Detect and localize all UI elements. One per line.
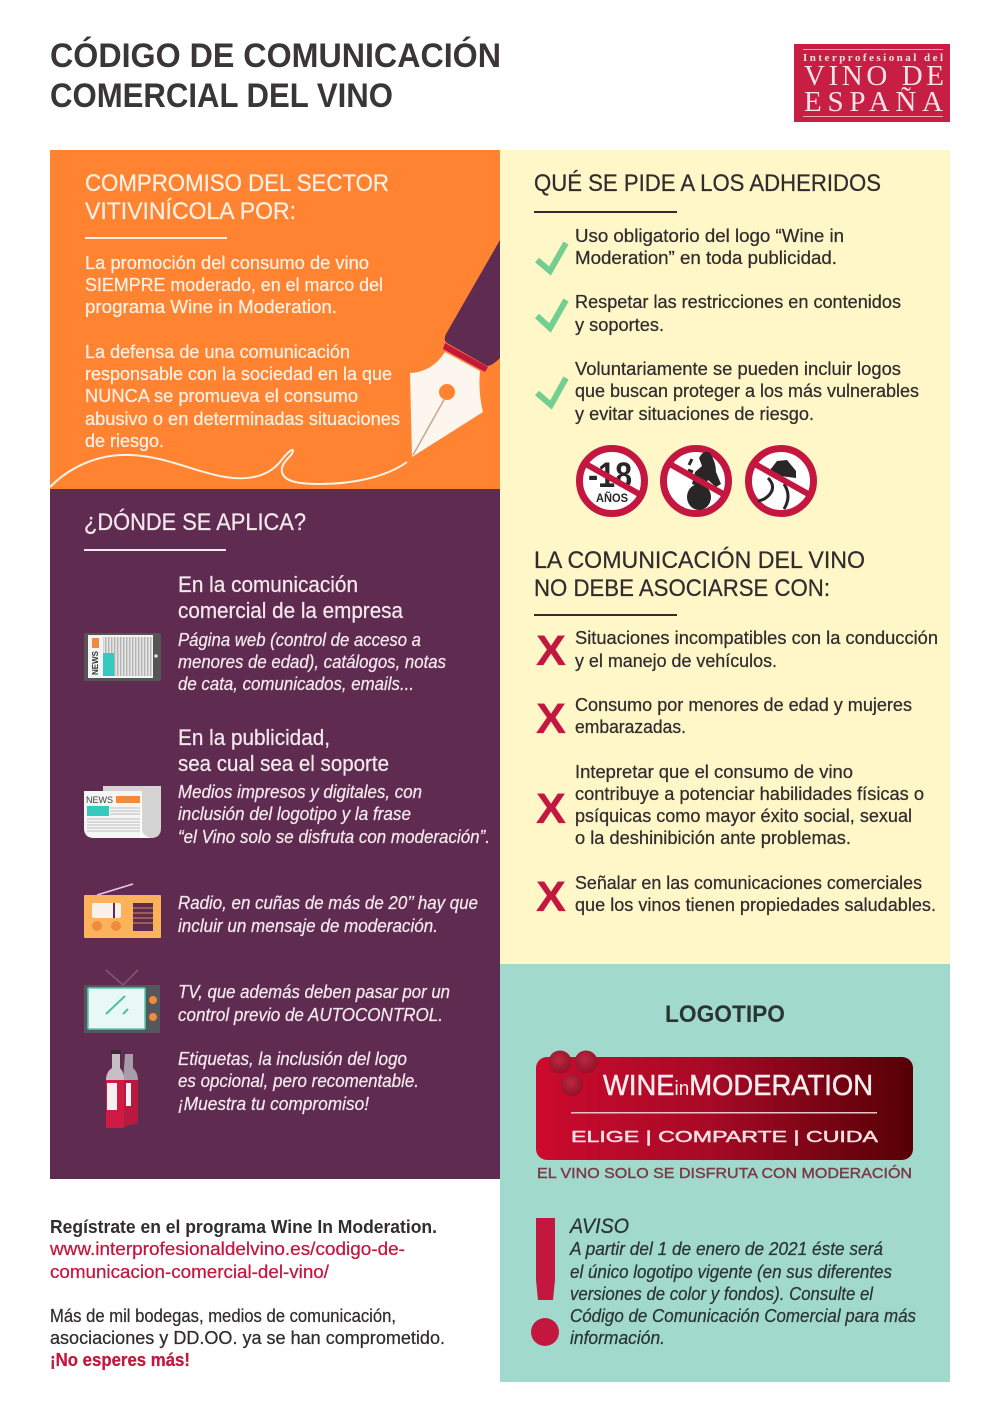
item: habilidades: psíquicas como mayor éxito social, sexual	[575, 806, 912, 826]
text block: regístrate: Regístrate en el programa Wine In Moderation.	[50, 1217, 437, 1237]
icon: check 2	[537, 300, 566, 328]
text block: promoción: La promoción del consumo de vino	[85, 253, 369, 273]
text block: medios	[178, 782, 490, 847]
text block: medios: inclusión del logotipo y la frase	[178, 804, 411, 824]
title: CÓDIGO DE COMUNICACIÓN	[50, 37, 501, 75]
text block: promoción: programa Wine in Moderation.	[85, 297, 337, 317]
item: saludables: que los vinos tienen propiedades saludables.	[575, 895, 936, 915]
item: logo obligatorio	[575, 226, 844, 268]
item: restricciones: Respetar las restricciones en contenidos	[575, 292, 901, 312]
icon: exclamation mark	[531, 1218, 559, 1346]
logo: wine in moderation	[536, 1050, 913, 1160]
text block: tv	[178, 982, 450, 1025]
item: conducción	[575, 628, 938, 671]
text block: tv: TV, que además deben pasar por un	[178, 982, 450, 1002]
text block: medios: Medios impresos y digitales, con	[178, 782, 422, 802]
title: COMERCIAL DEL VINO	[50, 77, 393, 115]
text block: aviso: Código de Comunicación Comercial para más	[570, 1306, 916, 1326]
icon: prohibido menores de 18: -18	[588, 456, 632, 495]
subheading: comunicación comercial: comercial de la empresa	[178, 598, 404, 623]
text block: medios: “el Vino solo se disfruta con moderación”.	[178, 827, 490, 847]
item: menores: Consumo por menores de edad y mujeres	[575, 695, 912, 715]
icon: television	[84, 970, 160, 1033]
icon: newspaper: NEWS	[86, 795, 113, 806]
heading: compromiso: VITIVINÍCOLA POR:	[85, 198, 296, 225]
icon: tablet news: NEWS	[91, 650, 100, 675]
heading: compromiso	[85, 170, 389, 225]
item: menores: embarazadas.	[575, 717, 686, 737]
icon: prohibido menores de 18	[580, 448, 644, 514]
item: saludables: Señalar en las comunicaciones comerciales	[575, 873, 922, 893]
text block: tv: control previo de AUTOCONTROL.	[178, 1005, 443, 1025]
text block: etiquetas: ¡Muestra tu compromiso!	[178, 1094, 369, 1114]
item: restricciones	[575, 292, 901, 335]
icon: newspaper	[84, 786, 161, 838]
text block: defensa: responsable con la sociedad en la que	[85, 364, 392, 384]
text block: página web	[178, 630, 446, 694]
text block: aviso: el único logotipo vigente (en sus diferentes	[570, 1262, 892, 1282]
heading: dónde se aplica: ¿DÓNDE SE APLICA?	[84, 509, 306, 536]
panel: logotipo	[500, 964, 950, 1382]
text block: etiquetas: es opcional, pero recomentable.	[178, 1071, 419, 1091]
text block: defensa: abusivo o en determinadas situaciones	[85, 409, 400, 429]
item: habilidades: contribuye a potenciar habilidades físicas o	[575, 784, 924, 804]
heading: no debe asociarse	[534, 547, 865, 602]
text block: más de mil bodegas	[50, 1306, 445, 1370]
subheading: comunicación comercial	[178, 572, 404, 623]
icon: x 4: X	[536, 873, 566, 921]
icon: wine bottles	[106, 1050, 138, 1128]
text block: etiquetas	[178, 1049, 419, 1114]
icon: x 2: X	[536, 695, 566, 743]
logo: Interprofesional del Vino de España: Interprofesional del	[803, 52, 943, 64]
item: logos voluntarios: y evitar situaciones de riesgo.	[575, 404, 814, 424]
logo: wine in moderation: ELIGE | COMPARTE | CUIDA	[571, 1129, 878, 1146]
text block: regístrate: www.interprofesionaldelvino.es/codigo-de-	[49, 1239, 405, 1259]
logo: Interprofesional del Vino de España: VINO DE	[804, 60, 944, 92]
text block: etiquetas: Etiquetas, la inclusión del logo	[178, 1049, 407, 1069]
heading: no debe asociarse: NO DEBE ASOCIARSE CON:	[534, 575, 830, 602]
item: logo obligatorio: Moderation” en toda publicidad.	[575, 248, 837, 268]
text block: defensa: La defensa de una comunicación	[85, 342, 350, 362]
tagline: EL VINO SOLO SE DISFRUTA CON MODERACIÓN	[537, 1165, 912, 1182]
text block: radio: incluir un mensaje de moderación.	[178, 916, 438, 936]
icon: radio	[84, 884, 161, 938]
icon: prohibido conducir	[748, 448, 814, 514]
text block: página web: Página web (control de acceso a	[178, 630, 421, 650]
text block: defensa: NUNCA se promueva el consumo	[85, 386, 358, 406]
item: habilidades: Intepretar que el consumo de vino	[575, 762, 853, 782]
subheading: comunicación comercial: En la comunicación	[178, 572, 358, 597]
logo: Interprofesional del Vino de España: ESPAÑA	[804, 86, 943, 118]
heading: compromiso: COMPROMISO DEL SECTOR	[85, 170, 389, 197]
text block: página web: menores de edad), catálogos, notas	[178, 652, 446, 672]
text block: radio	[178, 893, 478, 936]
panel: dónde se aplica	[50, 489, 500, 1179]
text block: aviso	[568, 1215, 916, 1348]
text block: más de mil bodegas: ¡No esperes más!	[50, 1350, 190, 1370]
icon: prohibido menores de 18: AÑOS	[596, 490, 628, 505]
text block: radio: Radio, en cuñas de más de 20’’ hay que	[178, 893, 478, 913]
text block: regístrate: comunicacion-comercial-del-vino/	[50, 1262, 329, 1282]
logo: Interprofesional del Vino de España	[794, 44, 950, 122]
heading: no debe asociarse: LA COMUNICACIÓN DEL VINO	[534, 547, 865, 574]
icon: prohibido embarazadas	[664, 448, 728, 514]
text block: aviso: AVISO	[568, 1215, 629, 1238]
text block: aviso: versiones de color y fondos). Consulte el	[570, 1284, 874, 1304]
item: logos voluntarios: que buscan proteger a los más vulnerables	[575, 381, 919, 401]
text block: promoción	[85, 253, 383, 317]
subheading: publicidad: En la publicidad,	[178, 725, 330, 750]
item: conducción: y el manejo de vehículos.	[575, 651, 777, 671]
item: conducción: Situaciones incompatibles con la conducción	[575, 628, 938, 648]
text block: regístrate	[49, 1217, 437, 1282]
text block: promoción: SIEMPRE moderado, en el marco del	[85, 275, 383, 295]
text block: defensa	[85, 342, 400, 451]
panel: compromiso del sector	[50, 150, 500, 489]
text block: defensa: de riesgo.	[85, 431, 164, 451]
icon: tablet news	[84, 633, 161, 681]
item: menores	[575, 695, 912, 737]
item: logos voluntarios: Voluntariamente se pueden incluir logos	[575, 359, 901, 379]
item: habilidades: o la deshinibición ante problemas.	[575, 828, 851, 848]
text block: página web: de cata, comunicados, emails...	[178, 674, 414, 694]
logo: wine in moderation: WINEinMODERATION	[603, 1070, 873, 1102]
icon: x 3: X	[536, 785, 566, 833]
panel: qué se pide	[500, 150, 950, 964]
item: saludables	[575, 873, 936, 915]
heading: qué se pide: QUÉ SE PIDE A LOS ADHERIDOS	[534, 170, 881, 197]
subheading: publicidad	[178, 725, 389, 776]
subheading: publicidad: sea cual sea el soporte	[178, 751, 389, 776]
item: habilidades	[575, 762, 924, 848]
item: restricciones: y soportes.	[575, 315, 664, 335]
text block: aviso: A partir del 1 de enero de 2021 éste será	[569, 1239, 883, 1259]
icon: x 1: X	[536, 627, 566, 675]
icon: check 1	[537, 243, 566, 271]
icon: check 3	[537, 378, 566, 405]
title	[50, 37, 501, 115]
text block: más de mil bodegas: Más de mil bodegas, medios de comunicación,	[50, 1306, 396, 1326]
text block: más de mil bodegas: asociaciones y DD.OO. ya se han comprometido.	[50, 1328, 445, 1348]
text block: aviso: información.	[570, 1328, 665, 1348]
item: logos voluntarios	[575, 359, 919, 424]
heading: logotipo: LOGOTIPO	[665, 1001, 785, 1028]
item: logo obligatorio: Uso obligatorio del logo “Wine in	[575, 226, 844, 246]
icon: fountain pen	[50, 240, 500, 487]
